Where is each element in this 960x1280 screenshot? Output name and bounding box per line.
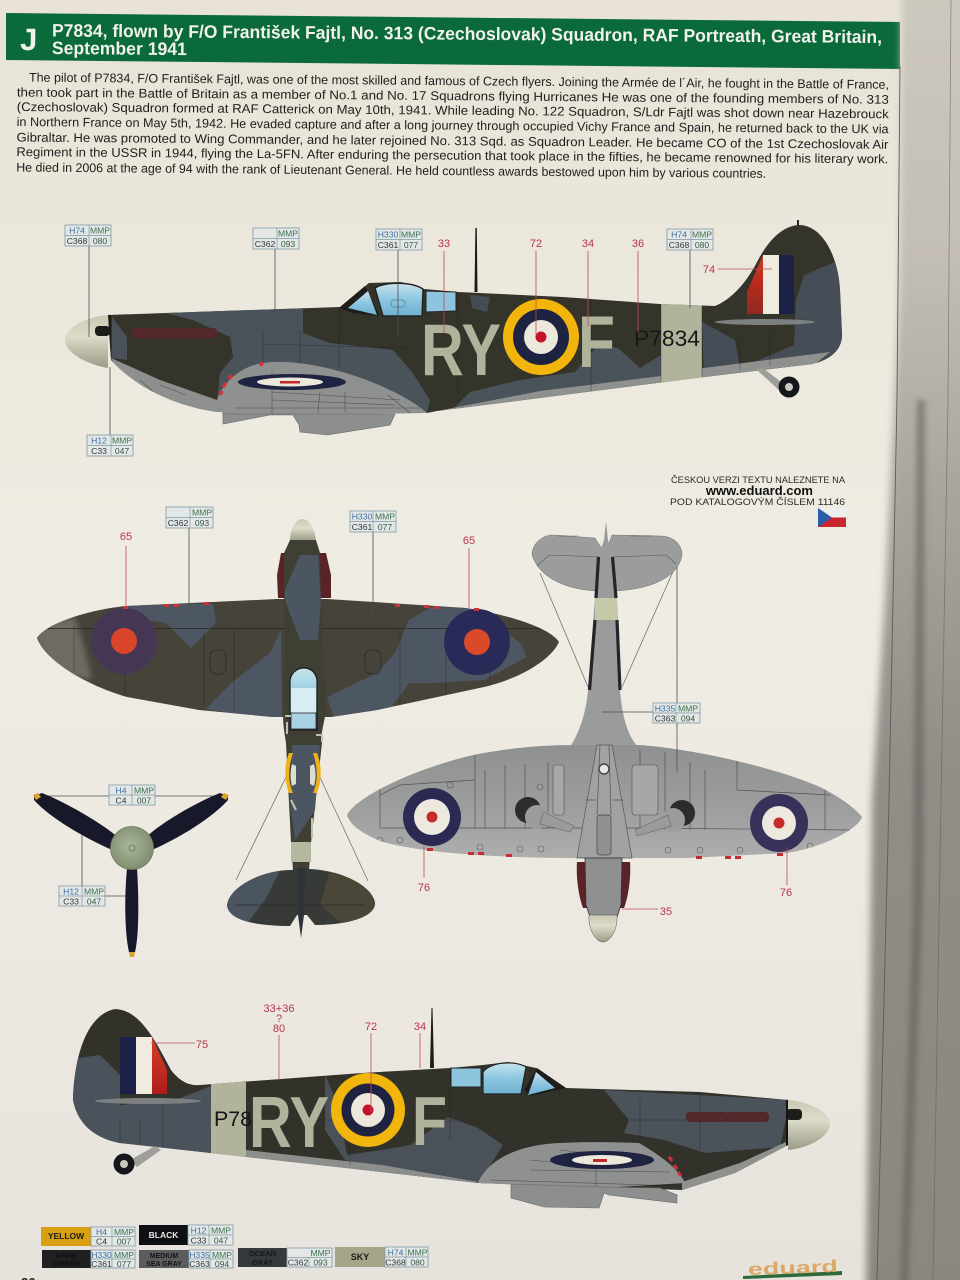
paint code C362: MMP <box>278 229 298 239</box>
fuselage camouflage lower <box>73 1009 788 1190</box>
swatch yellow: H4 <box>96 1227 107 1237</box>
code letter F: F <box>578 302 615 383</box>
paint code H12: 047 <box>115 446 129 456</box>
cockpit canopy lower <box>451 1063 566 1096</box>
paint code H74 band: H74 <box>671 230 687 240</box>
description text block: in Northern France on May 5th, 1942. He evaded capture and after a long journey through occupied Vichy France and Spain, he returned back to the UK via <box>17 115 889 136</box>
exhausts underside <box>577 862 630 908</box>
code letter F lower: F <box>412 1082 447 1160</box>
swatch black: MMP <box>211 1225 231 1235</box>
sky band top view <box>291 842 311 862</box>
description text block: Gibraltar. He was promoted to Wing Commander, and he later rejoined No. 313 Sqd. as Squadron Leader. He became CO of the 1st Czechoslovak Air <box>16 130 889 152</box>
paint code H74 nose: C368 <box>67 236 87 246</box>
landing gear wheels <box>515 797 695 836</box>
decal number 33+36 ? 80 <box>264 1003 294 1080</box>
bracing lines underside <box>540 567 675 687</box>
spinner underside <box>589 915 617 942</box>
Czech flag <box>818 508 846 527</box>
decal number 34: 34 <box>582 238 594 250</box>
decal number 76 right: 76 <box>780 887 792 899</box>
paint code H335: H335 <box>655 703 675 713</box>
left wing roundel <box>91 608 157 674</box>
swatch dark green: C361 <box>91 1259 112 1269</box>
tailplane lower <box>95 1098 201 1104</box>
paint code H4 <box>109 785 155 805</box>
paint code H74 nose: H74 <box>69 226 85 236</box>
description text block: He died in 2006 at the age of 94 with the rank of Lieutenant General. He held countless awards bestowed upon him by various countries. <box>16 160 766 181</box>
fuselage underside <box>570 521 638 747</box>
description text block: then took part in the Battle of Britain as a member of No.1 and No. 17 Squadrons flying Hurricanes He was one of the founding members of No. 313 <box>17 85 889 107</box>
paint code H12 propeller <box>59 886 105 906</box>
paint code H12: MMP <box>112 436 132 446</box>
swatch ocean gray: MMP <box>310 1248 331 1258</box>
decal number 74 <box>703 264 772 276</box>
swatch medium sea gray: 094 <box>215 1259 229 1269</box>
Czech version note: www.eduard.com <box>705 483 813 498</box>
decal number 72: 72 <box>530 238 542 250</box>
swatch medium sea gray: C363 <box>189 1259 210 1269</box>
serial number: P7834 <box>634 326 700 351</box>
fuselage top view <box>283 540 326 870</box>
swatch dark green: GREEN <box>53 1259 80 1268</box>
swatch black: 047 <box>214 1235 228 1245</box>
decal number 76 right <box>780 847 792 899</box>
left side profile aircraft <box>60 1000 830 1208</box>
fin flash <box>747 255 794 314</box>
profile callouts, right side <box>65 225 772 456</box>
propeller blades <box>33 793 229 957</box>
paint code H335: MMP <box>678 703 698 713</box>
lower wing <box>217 362 427 415</box>
tail wheel lower <box>114 1146 161 1174</box>
swatch ocean gray: GRAY <box>252 1258 273 1267</box>
decal number 72 lower: 72 <box>365 1021 377 1033</box>
fuselage code fragments and roundel edges <box>285 716 322 838</box>
description text block: The pilot of P7834, F/O František Fajtl, was one of the most skilled and famous of Czech flyers. Joining the Armée de l´Air, he fought in the Battle of France, <box>29 71 889 92</box>
decal number 33 <box>438 238 450 333</box>
swatch black: BLACK <box>149 1230 179 1240</box>
paint code H4: 007 <box>137 795 151 805</box>
tail panel lines <box>537 536 676 566</box>
swatch dark green: MMP <box>114 1250 134 1260</box>
description text block <box>16 71 890 182</box>
paint code H12: C33 <box>91 446 107 456</box>
decal number 34 lower <box>414 1021 426 1068</box>
paint code H74 nose: MMP <box>90 226 110 236</box>
left wing roundel underside <box>403 788 461 846</box>
swatch black <box>139 1225 233 1245</box>
firewall line lower <box>786 1098 788 1146</box>
decal number 36 <box>632 238 644 333</box>
swatch yellow <box>41 1227 135 1246</box>
swatch black: C33 <box>191 1235 207 1245</box>
page gutter shading <box>866 0 960 1280</box>
fuselage camouflage top view <box>285 555 321 840</box>
swatch medium sea gray: MMP <box>212 1250 232 1260</box>
oval panels <box>553 765 564 815</box>
spinner lower <box>788 1100 830 1150</box>
wing roundel <box>238 374 346 390</box>
spinner top view <box>290 519 316 541</box>
decal number 65 right: 65 <box>463 535 475 547</box>
swatch medium sea gray <box>139 1250 233 1269</box>
right side profile aircraft <box>65 220 850 435</box>
paint code C362: 093 <box>281 239 295 249</box>
paint code C362 <box>253 228 299 320</box>
tailplane underside <box>532 535 682 591</box>
swatch medium sea gray: MEDIUM <box>150 1253 178 1260</box>
exhaust stubs lower <box>686 1112 769 1122</box>
right wing roundel <box>444 609 510 675</box>
paint code H330: C361 <box>378 240 398 250</box>
wing underside <box>347 745 862 858</box>
decal number 35: 35 <box>660 906 672 918</box>
rudder top view <box>297 868 305 938</box>
decal number 75: 75 <box>196 1039 208 1051</box>
swatch black: H12 <box>191 1225 207 1235</box>
red markers underside <box>427 848 783 859</box>
section letter J: J <box>20 22 37 57</box>
fin flash lower <box>120 1037 167 1094</box>
paint code H74 nose <box>65 225 111 337</box>
paint code C362 top view: 093 <box>195 518 209 528</box>
title text <box>52 21 882 65</box>
decal number 33+36 ? 80: 80 <box>273 1023 285 1035</box>
paint code H74 band <box>667 229 713 308</box>
decal number 65 left: 65 <box>120 531 132 543</box>
description text block: Regiment in the USSR in 1944, flying the La-5FN. After enduring the persecution that took place in the fifties, he became renowned for his literary work. <box>16 145 888 166</box>
decal number 34 lower: 34 <box>414 1021 426 1033</box>
panel lines <box>140 299 810 396</box>
propeller callout lines <box>36 796 226 896</box>
radiator lower <box>511 1184 677 1208</box>
paint code H74 band: MMP <box>692 230 712 240</box>
fin tip mast <box>797 220 799 226</box>
paint code H330 top view <box>350 511 396 615</box>
decal number 76 left <box>418 846 430 894</box>
decal number 33+36 ? 80: ? <box>276 1013 282 1025</box>
paint code H4: MMP <box>134 785 154 795</box>
paint code C362 top view: C362 <box>168 518 188 528</box>
sky band lower <box>211 1082 246 1162</box>
decal number 35 <box>622 906 672 918</box>
sky band <box>661 300 702 385</box>
paint code H4: H4 <box>116 785 127 795</box>
decal number 34 <box>582 238 594 327</box>
color legend <box>41 1225 428 1269</box>
decal number 65 right <box>463 535 475 608</box>
top view aircraft <box>30 507 565 938</box>
Czech version note: POD KATALOGOVÝM ČÍSLEM 11146 <box>670 496 845 507</box>
paint code H12 propeller: H12 <box>63 886 79 896</box>
swatch sky: MMP <box>407 1247 428 1257</box>
paint code H330: MMP <box>401 230 421 240</box>
red markers top view <box>123 602 479 611</box>
exhausts top view <box>277 553 331 598</box>
decal number 33: 33 <box>438 238 450 250</box>
decal number 36: 36 <box>632 238 644 250</box>
paint code H335: 094 <box>681 713 695 723</box>
underside view aircraft <box>340 521 870 942</box>
profile callouts, left side <box>151 1003 426 1112</box>
exhaust stubs <box>132 328 217 338</box>
paint code C362 top view <box>166 507 213 615</box>
sky band underside <box>595 598 617 620</box>
swatch sky: C368 <box>385 1257 406 1267</box>
title text: September 1941 <box>52 38 187 59</box>
propeller <box>33 785 229 957</box>
propeller stub lower <box>786 1109 802 1120</box>
paint code H12 <box>87 367 133 456</box>
fuselage roundel <box>503 299 579 375</box>
swatch sky: SKY <box>351 1252 369 1262</box>
nose firewall line <box>108 310 111 368</box>
Czech version note <box>670 474 846 527</box>
tailplane top view <box>227 869 375 926</box>
paint code H12 propeller: 047 <box>87 896 101 906</box>
fuselage camouflage <box>100 220 850 420</box>
center section underside <box>577 745 632 858</box>
fuselage roundel lower <box>331 1073 405 1147</box>
swatch yellow: 007 <box>117 1236 131 1246</box>
cockpit top view <box>290 668 317 730</box>
decal number 65 left <box>120 531 132 607</box>
paint code H330: H330 <box>378 230 398 240</box>
title text: P7834, flown by F/O František Fajtl, No. 313 (Czechoslovak) Squadron, RAF Portreath, Great Britain, <box>52 21 882 47</box>
swatch sky: 080 <box>410 1257 425 1267</box>
swatch yellow: C4 <box>96 1236 107 1246</box>
propeller hub <box>110 826 154 870</box>
paint code H12: H12 <box>91 436 107 446</box>
description text block: (Czechoslovak) Squadron formed at RAF Catterick on May 10th, 1941. While leading No. 122 Squadron, S/Ldr Fajtl was shot down near Hazebrouck <box>17 100 890 121</box>
paint code H74 band: 080 <box>695 240 709 250</box>
propeller stub <box>95 326 110 336</box>
paint code H12 propeller: C33 <box>63 896 79 906</box>
wing roundel lower <box>550 1151 654 1169</box>
swatch dark green <box>42 1250 135 1269</box>
antenna mast lower <box>430 1008 434 1068</box>
paint code C362: C362 <box>255 239 275 249</box>
title banner <box>6 13 900 69</box>
code letters RY: RY <box>421 310 501 391</box>
swatch yellow: MMP <box>114 1227 134 1237</box>
swatch ocean gray <box>238 1248 332 1268</box>
dark fuselage edges <box>590 557 620 690</box>
swatch sky: H74 <box>388 1247 404 1257</box>
decal number 72 lower <box>365 1021 377 1112</box>
serial fragment: P78 <box>214 1108 252 1131</box>
nose underside <box>585 858 622 917</box>
decal number 72 <box>530 238 542 335</box>
red wing markers lower <box>669 1157 681 1176</box>
eduard logo: eduard <box>747 1257 838 1279</box>
paint code C362 top view: MMP <box>192 508 212 518</box>
radiator and oil cooler <box>223 414 395 435</box>
swatch ocean gray: 093 <box>313 1258 328 1268</box>
swatch ocean gray: C362 <box>288 1258 308 1268</box>
paint code H330 top view: 077 <box>378 522 392 532</box>
swatch dark green: H330 <box>91 1250 112 1260</box>
right wing roundel underside <box>750 794 808 852</box>
Czech version note: ČESKOU VERZI TEXTU NALEZNETE NA <box>671 474 846 485</box>
center section details <box>586 745 623 855</box>
swatch dark green: DARK <box>56 1251 78 1260</box>
paint code H330: 077 <box>404 240 418 250</box>
tailplane <box>715 319 815 325</box>
paint code H330 top view: C361 <box>352 522 372 532</box>
spinner <box>65 315 108 368</box>
swatch sky <box>335 1247 428 1267</box>
wing lower view <box>478 1142 685 1188</box>
paint code H4: C4 <box>116 795 127 805</box>
decal number 75 <box>151 1039 208 1051</box>
paint code H330 top view: H330 <box>352 512 372 522</box>
red wing markers <box>220 362 262 395</box>
decal number 76 left: 76 <box>418 882 430 894</box>
paint code H335 <box>602 567 700 772</box>
code letters RY lower: RY <box>249 1083 329 1163</box>
antenna mast <box>474 228 478 292</box>
decal number 74: 74 <box>703 264 715 276</box>
wings top view <box>30 595 565 720</box>
paint code H335: C363 <box>655 713 675 723</box>
eduard logo <box>743 1257 842 1279</box>
tail wheel <box>756 368 800 398</box>
swatch medium sea gray: H335 <box>189 1250 210 1260</box>
paint code H74 nose: 080 <box>93 236 107 246</box>
swatch ocean gray: OCEAN <box>249 1249 276 1258</box>
tail bracing lines <box>236 773 368 881</box>
decal number 33+36 ? 80: 33+36 <box>264 1003 294 1015</box>
paint code H330 <box>376 229 422 335</box>
swatch medium sea gray: SEA GRAY <box>146 1261 182 1268</box>
paint code H330 top view: MMP <box>375 512 395 522</box>
paint code H74 band: C368 <box>669 240 689 250</box>
cockpit canopy <box>339 283 456 316</box>
paint code H12 propeller: MMP <box>84 886 104 896</box>
swatch dark green: 077 <box>117 1259 131 1269</box>
swatch yellow: YELLOW <box>48 1231 85 1241</box>
